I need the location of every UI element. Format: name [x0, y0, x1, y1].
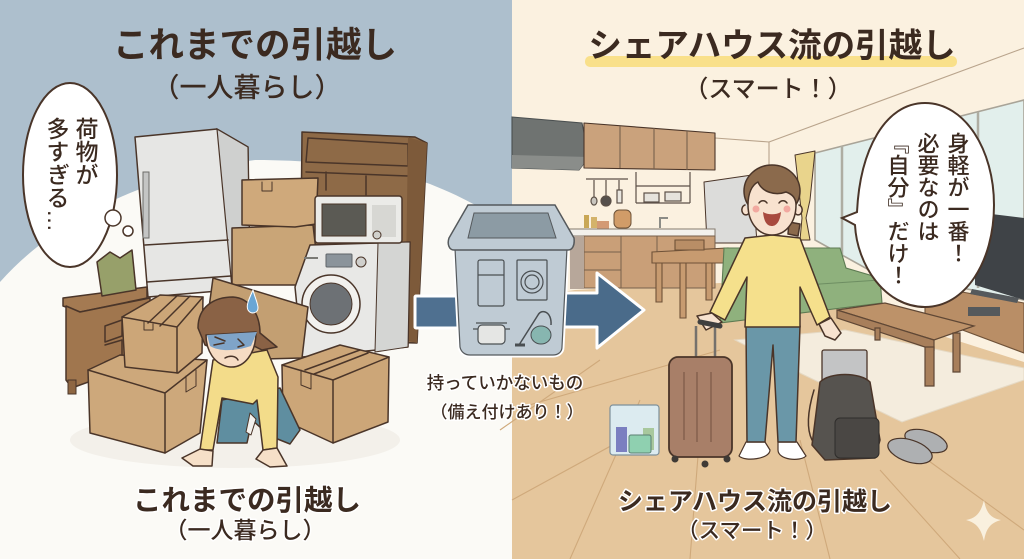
- face: [206, 332, 256, 367]
- television and stand: [925, 212, 1024, 353]
- sock: [246, 413, 256, 435]
- caption: left: [133, 485, 361, 543]
- hands: [697, 313, 841, 340]
- kitchen utensils and shelf: [586, 172, 690, 206]
- washing machine: [295, 242, 410, 357]
- coffee table: [837, 303, 974, 386]
- cardboard box big: [88, 355, 207, 453]
- refrigerator: [135, 129, 250, 297]
- ponytail and hair: [198, 297, 277, 358]
- bubble text: 多すぎる…: [43, 117, 69, 232]
- hands: [182, 448, 287, 467]
- bubble text: [43, 117, 98, 232]
- bin caption: [427, 373, 584, 422]
- bin icon: pot: [473, 323, 510, 344]
- bin caption: 持っていかないもの: [427, 373, 583, 393]
- bubble text: 必要なのは: [914, 132, 940, 242]
- cardboard box right: [282, 345, 389, 443]
- cardboard box middle: [122, 295, 203, 373]
- kitchen counter and cabinets: [569, 229, 715, 289]
- arms and sweater: [710, 235, 830, 327]
- room floor: [512, 283, 1024, 559]
- suitcase: [669, 322, 732, 468]
- face: [748, 182, 796, 235]
- kitchen upper cabinets: [584, 123, 715, 170]
- socks: [739, 442, 806, 459]
- speech bubble: right: [842, 103, 994, 307]
- subtitle: right: （スマート！）: [684, 76, 852, 103]
- subtitle: left: （一人暮らし）: [152, 73, 342, 103]
- kitchen fridge: [704, 175, 757, 243]
- rug: [735, 330, 1024, 422]
- bubble text: 荷物が: [72, 117, 98, 186]
- panel: left background: [0, 0, 512, 559]
- arrow: pointing right: [560, 273, 644, 348]
- shelf furniture: [300, 132, 427, 343]
- sweat drop: [247, 290, 258, 313]
- cardboard box open: [206, 278, 308, 360]
- bin icon: fridge: [478, 260, 504, 306]
- panel: right room background: [500, 0, 1024, 559]
- speech bubble: left: [23, 83, 133, 267]
- bin caption: （備え付けあり！）: [430, 403, 584, 422]
- shopping bag: [97, 250, 136, 296]
- bubble text: 身軽が一番！: [944, 132, 970, 264]
- bubble text: 『自分』だけ！: [884, 132, 910, 286]
- window: [815, 100, 1024, 300]
- person: happy with suitcase: [697, 165, 841, 459]
- jeans: [217, 388, 300, 444]
- yellow sweater: [200, 350, 278, 450]
- backpack: [808, 374, 880, 460]
- title: right: シェアハウス流の引越し: [588, 28, 956, 65]
- dining table and chairs: [652, 240, 728, 318]
- ears: [742, 205, 802, 215]
- title highlight: [585, 56, 957, 67]
- caption: left: （一人暮らし）: [164, 517, 326, 543]
- person: struggling on hands and knees: [182, 290, 300, 467]
- bin icon: washer: [517, 260, 547, 300]
- arrow: stub entering bin: [415, 296, 465, 328]
- ponytail: [788, 222, 800, 236]
- range hood: [512, 117, 589, 170]
- gloom shading: [207, 332, 257, 350]
- microwave: [315, 196, 402, 243]
- curtain: [795, 151, 815, 240]
- bubble text: [884, 132, 970, 286]
- caption: left: これまでの引越し: [133, 485, 361, 517]
- trash bin: [448, 205, 574, 355]
- green sofa: [720, 248, 882, 323]
- bedside cabinet: [63, 287, 150, 394]
- bin icon: vacuum: [515, 312, 551, 345]
- caption: right: シェアハウス流の引越し: [618, 488, 892, 516]
- caption: right: （スマート！）: [677, 519, 827, 543]
- slippers: [885, 425, 950, 469]
- caption: right: [618, 488, 892, 543]
- hair: [744, 165, 800, 217]
- stacked boxes back: [232, 178, 320, 285]
- toiletry pouch: [610, 405, 659, 455]
- trousers: [746, 326, 800, 442]
- title: left: これまでの引越し: [113, 25, 397, 65]
- sparkle: [966, 500, 1001, 541]
- kitchen counter items: [584, 210, 668, 229]
- laptop: [822, 350, 867, 388]
